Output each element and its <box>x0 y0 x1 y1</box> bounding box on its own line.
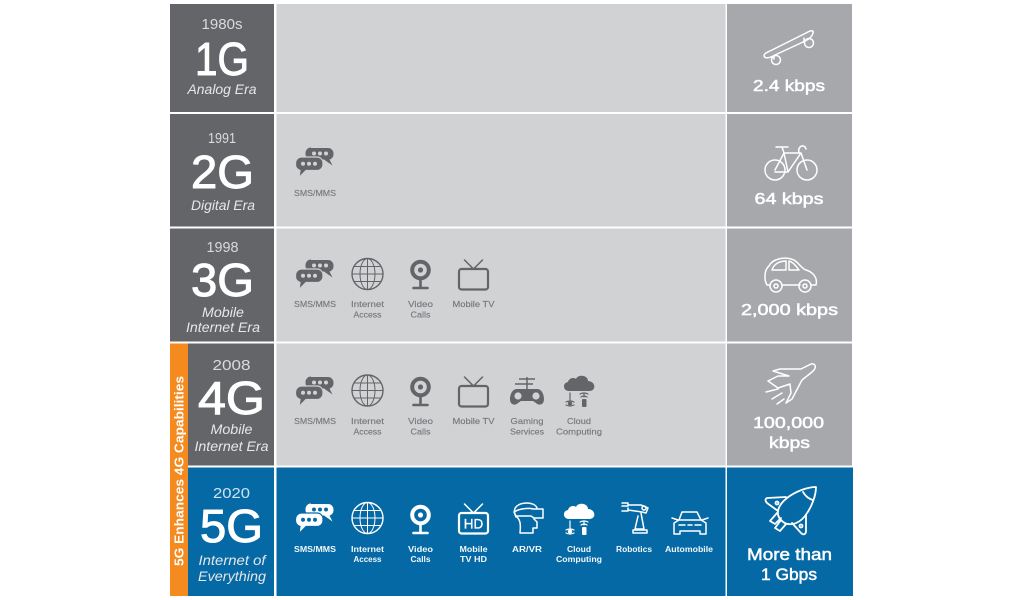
label: Cloud Computing <box>556 544 602 564</box>
icon: automobile <box>672 512 708 534</box>
panel: 5G generation: Internet of <box>198 553 267 568</box>
icon: cloud <box>564 504 594 535</box>
panel: 3G generation: 3G <box>191 254 254 306</box>
panel: 1G speed <box>727 4 852 112</box>
label: Internet Access <box>351 544 384 564</box>
label: Internet Access <box>351 299 385 320</box>
panel: 2G generation: 1991 <box>208 130 236 147</box>
panel: 4G generation: Internet Era <box>194 439 269 454</box>
panel: 5G generation: 2020 <box>213 485 250 502</box>
label: Video Calls: Calls <box>410 310 430 320</box>
label: Cloud Computing: Computing <box>556 426 602 436</box>
icon: car <box>765 258 816 292</box>
panel: 4G generation: 2008 <box>212 357 250 374</box>
label: Internet Access: Access <box>354 554 382 564</box>
icon: robot arm <box>622 503 648 533</box>
icon: bicycle <box>765 146 817 180</box>
icon: cloud <box>564 376 594 407</box>
label: SMS/MMS: SMS/MMS <box>294 544 336 554</box>
panel: 1G generation: 1980s <box>202 16 242 33</box>
icon: SMS/MMS <box>295 260 334 290</box>
icon: video camera <box>412 262 429 288</box>
label: Mobile TV HD: Mobile <box>460 544 488 554</box>
panel: 2G speed: 64 kbps <box>754 191 824 208</box>
label: Video Calls <box>408 416 433 436</box>
label: Cloud Computing: Computing <box>556 554 602 564</box>
label: Video Calls: Calls <box>410 426 430 436</box>
label: SMS/MMS: SMS/MMS <box>294 416 336 426</box>
label: Video Calls: Calls <box>410 554 431 564</box>
panel: 3G generation: Mobile <box>202 305 244 320</box>
label: Video Calls <box>408 544 433 564</box>
panel: 3G generation <box>170 228 274 342</box>
panel: 3G speed: 2,000 kbps <box>741 302 838 319</box>
label: Gaming Services: Gaming <box>510 416 544 426</box>
label: Video Calls: Video <box>408 299 433 309</box>
row: 1G <box>170 4 852 112</box>
panel: 5G speed: 1 Gbps <box>761 565 817 584</box>
label: Video Calls <box>408 299 433 320</box>
row: 5G <box>188 468 853 596</box>
panel: 2G generation <box>170 114 274 226</box>
label: Cloud Computing: Cloud <box>567 544 591 554</box>
panel: 1G services (empty) <box>276 4 726 112</box>
icon: video camera <box>412 507 429 533</box>
label: Mobile TV: Mobile TV <box>452 416 495 426</box>
label: SMS/MMS: SMS/MMS <box>294 299 336 309</box>
panel: 4G speed <box>727 344 852 466</box>
label: Video Calls: Video <box>408 416 433 426</box>
panel: 3G generation: 1998 <box>206 239 238 256</box>
label: AR/VR: AR/VR <box>512 544 543 554</box>
side banner: 5G Enhances 4G Capabilities <box>170 344 188 596</box>
panel: 5G speed <box>727 468 853 596</box>
icon: video camera <box>412 379 429 405</box>
panel: 4G services <box>276 344 726 466</box>
label: Internet Access: Internet <box>351 544 384 554</box>
icon: SMS/MMS <box>295 148 334 178</box>
panel: 5G generation: 5G <box>200 500 263 552</box>
icon: HD TV: HD <box>464 516 483 532</box>
label: Gaming Services <box>510 416 544 436</box>
panel: 1G generation: 1G <box>195 33 249 85</box>
icon: globe <box>352 502 383 534</box>
icon: TV <box>459 377 488 406</box>
label: Mobile TV HD <box>460 544 488 564</box>
label: Cloud Computing: Cloud <box>567 416 591 426</box>
panel: 4G generation: Mobile <box>210 422 252 437</box>
icon: globe <box>352 258 383 290</box>
panel: 2G speed <box>727 114 852 226</box>
row: 3G <box>170 228 852 342</box>
icon: TV <box>459 260 488 290</box>
panel: 3G services <box>276 228 726 342</box>
label: Video Calls: Video <box>408 544 433 554</box>
panel: 3G speed <box>727 228 852 342</box>
label: Cloud Computing <box>556 416 602 436</box>
icon: globe <box>352 375 383 406</box>
label: Robotics: Robotics <box>616 544 652 554</box>
icon: skateboard <box>764 31 814 64</box>
label: Automobile: Automobile <box>665 544 713 554</box>
panel: 2G services <box>276 114 726 226</box>
icon: game controller <box>510 377 544 405</box>
label: Internet Access: Internet <box>351 299 385 309</box>
label: Internet Access: Access <box>354 310 382 320</box>
panel: 2G generation: Digital Era <box>191 198 255 213</box>
panel: 2G generation: 2G <box>191 146 254 198</box>
icon: SMS/MMS <box>295 504 334 534</box>
label: Mobile TV HD: TV HD <box>460 554 487 564</box>
row: 2G <box>170 114 852 226</box>
label: Gaming Services: Services <box>510 426 544 436</box>
label: Mobile TV: Mobile TV <box>452 299 495 309</box>
panel: 5G speed: More than <box>747 545 832 564</box>
icon: HD TV <box>459 504 488 534</box>
panel: 4G speed: 100,000 <box>753 415 824 432</box>
side banner: 5G Enhances 4G Capabilities: 5G Enhances 4G Capabilities <box>172 376 186 566</box>
icon: SMS/MMS <box>295 376 334 406</box>
panel: 1G generation <box>170 4 274 112</box>
panel: 1G generation: Analog Era <box>186 82 257 97</box>
row: 4G <box>188 344 852 466</box>
icon: rocket <box>766 487 816 534</box>
panel: 3G generation: Internet Era <box>186 320 261 335</box>
label: Internet Access <box>351 416 385 436</box>
panel: 5G generation: Everything <box>198 569 267 584</box>
icon: airplane <box>766 364 815 404</box>
panel: 1G speed: 2.4 kbps <box>753 78 825 95</box>
label: Internet Access: Access <box>354 426 382 436</box>
panel: 4G generation: 4G <box>198 372 265 424</box>
icon: AR/VR headset <box>514 503 543 533</box>
panel: 5G services <box>276 468 726 596</box>
panel: 5G generation <box>188 468 274 596</box>
panel: 4G speed: kbps <box>769 435 810 452</box>
panel: 4G generation <box>188 344 274 466</box>
label: Internet Access: Internet <box>351 416 385 426</box>
label: SMS/MMS: SMS/MMS <box>294 188 336 198</box>
